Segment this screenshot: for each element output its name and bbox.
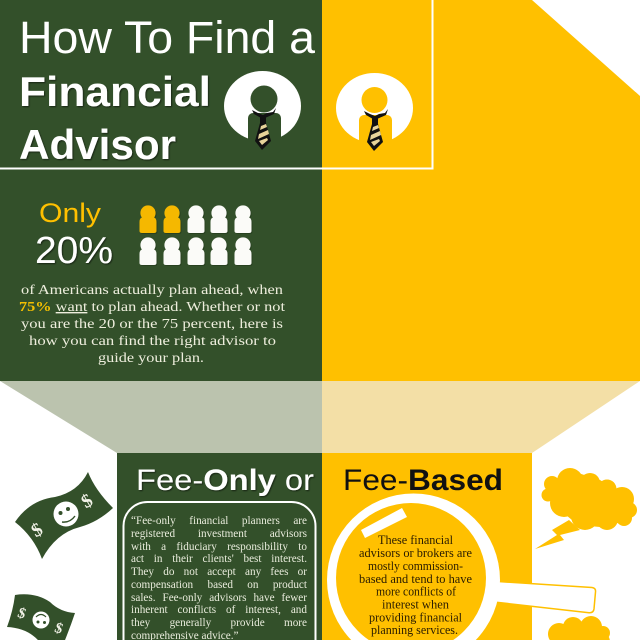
white corner triangle xyxy=(532,0,640,96)
statistic: only 20%: Only xyxy=(39,198,102,228)
funnel: green side xyxy=(0,381,322,453)
fee-based description: planning services. xyxy=(371,623,458,637)
title: Advisor xyxy=(19,121,176,168)
fee-based description xyxy=(359,533,472,637)
intro paragraph: 75% want to plan ahead. Whether or not xyxy=(19,300,285,315)
fee-based description: mostly commission- xyxy=(368,559,463,573)
panel: fee-based xyxy=(322,453,596,640)
icon: money bill with smile xyxy=(15,472,113,559)
fee-only description: “Fee-only financial planners are xyxy=(131,515,307,527)
fee-only description: sales. Fee-only advisors have fewer xyxy=(131,592,307,604)
fee-based description: advisors or brokers are xyxy=(359,546,472,560)
icon: advisor on yellow xyxy=(336,73,413,155)
intro paragraph: guide your plan. xyxy=(98,351,204,366)
fee-based description: providing financial xyxy=(369,610,463,624)
pictogram: 2 of 10 people xyxy=(140,205,252,266)
icon: small cloud, lower xyxy=(548,616,610,640)
yellow background panel xyxy=(322,0,640,381)
intro paragraph: you are the 20 or the 75 percent, here is xyxy=(21,317,283,332)
fee-only description: They do not accept any fees or xyxy=(131,566,307,578)
magnifying glass xyxy=(327,494,596,640)
statistic: only 20% xyxy=(35,198,113,272)
statistic: only 20%: 20% xyxy=(35,230,113,272)
icon: money bill with smile: $ xyxy=(78,490,97,513)
fee-only description xyxy=(131,515,307,640)
intro paragraph xyxy=(19,283,285,366)
fee-based description: more conflicts of xyxy=(376,584,457,598)
funnel: yellow side xyxy=(322,381,640,453)
intro paragraph: of Americans actually plan ahead, when xyxy=(21,283,283,298)
icon: storm cloud with lightning xyxy=(535,468,637,549)
fee-only description: with a fiduciary responsibility to xyxy=(131,540,307,552)
icon: money bill, lower xyxy=(7,594,75,640)
title xyxy=(19,12,316,168)
icon: money bill, lower: $ xyxy=(52,620,65,638)
icon: money bill, lower: $ xyxy=(15,605,28,623)
green background panel xyxy=(0,0,322,381)
fee-only description: they generally provide more xyxy=(131,617,307,629)
heading: fee-based: Fee-Based xyxy=(343,464,503,497)
intro paragraph: how you can find the right advisor to xyxy=(29,334,276,349)
panel: fee-only xyxy=(117,453,322,640)
fee-based description: interest when xyxy=(382,598,450,612)
icon: money bill with smile: $ xyxy=(28,519,47,542)
fee-only description: registered investment advisors xyxy=(131,528,307,540)
heading: fee-only or: Fee-Only or xyxy=(136,464,314,497)
rounded text box xyxy=(124,502,316,640)
fee-only description: inherent conflicts of interest, and xyxy=(131,604,307,616)
title: How To Find a xyxy=(19,12,316,63)
fee-based description: These financial xyxy=(378,533,454,547)
title frame line xyxy=(0,0,432,168)
icon: advisor on green xyxy=(224,71,301,153)
fee-only description: compensation based on product xyxy=(131,579,307,591)
fee-only description: act in their clients' best interest. xyxy=(131,553,307,565)
title: Financial xyxy=(19,68,211,115)
fee-based description: based and tend to have xyxy=(359,572,472,586)
